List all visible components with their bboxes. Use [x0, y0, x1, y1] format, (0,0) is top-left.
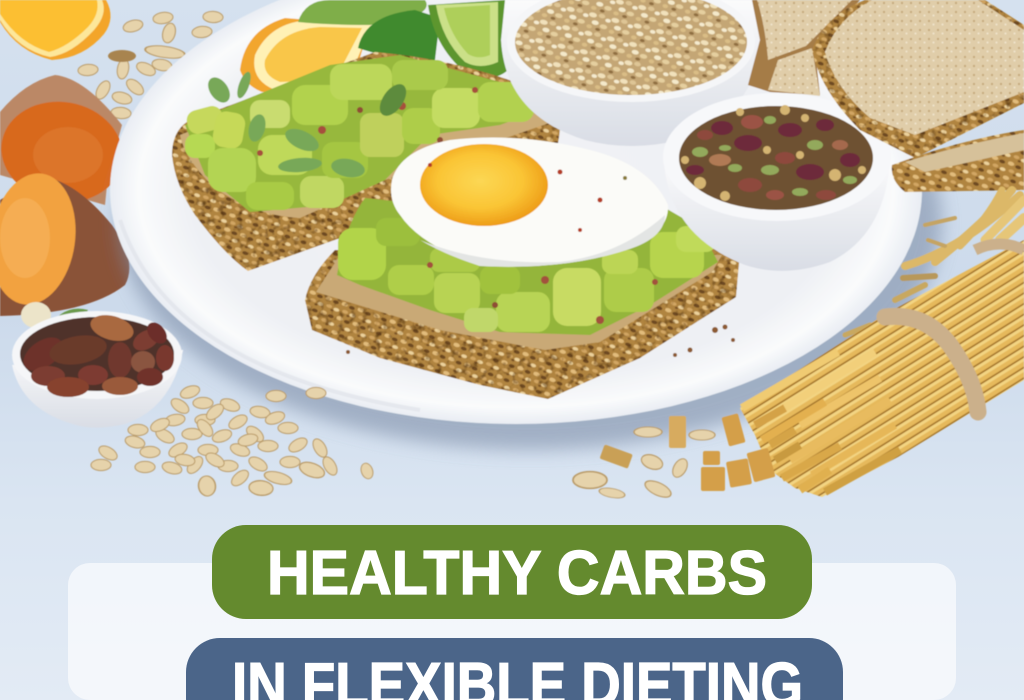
lemon slice: [240, 18, 372, 92]
title pill: healthy carbs: HEALTHY CARBS: [267, 539, 767, 608]
avocado mash front: [337, 198, 718, 335]
translucent white title panel: [68, 563, 956, 700]
pasta pieces and oats near bundle: [573, 413, 776, 500]
sweet potato cut light orange: [0, 168, 129, 316]
toast back left: [172, 52, 560, 271]
scattered pasta strands: [845, 190, 1024, 335]
herb leaves: [204, 70, 412, 180]
avocado mash back: [185, 55, 535, 212]
fried egg: [391, 138, 668, 267]
scattered oats top left: [78, 11, 223, 119]
orange wedge: [0, 0, 111, 60]
toast front: [305, 138, 740, 399]
pasta bundle: [740, 240, 1024, 497]
pasta tie: [885, 316, 978, 412]
bean and seed bowl: [663, 93, 891, 271]
oat pile: [91, 383, 375, 497]
title pill: healthy carbs: [212, 525, 812, 619]
lettuce leaves: [298, 0, 440, 60]
crumbs on plate: [346, 324, 735, 357]
grain bowl: [501, 0, 762, 146]
sweet potato cut deep orange: [0, 75, 131, 212]
food photo scene: [0, 0, 1024, 500]
plate shadow: [118, 0, 942, 450]
small bowl of kidney beans: [12, 311, 183, 428]
lime wedge: [428, 0, 508, 78]
almond and leaf: [21, 302, 88, 337]
bread slices right: [748, 0, 1024, 192]
white plate: [110, 0, 922, 424]
